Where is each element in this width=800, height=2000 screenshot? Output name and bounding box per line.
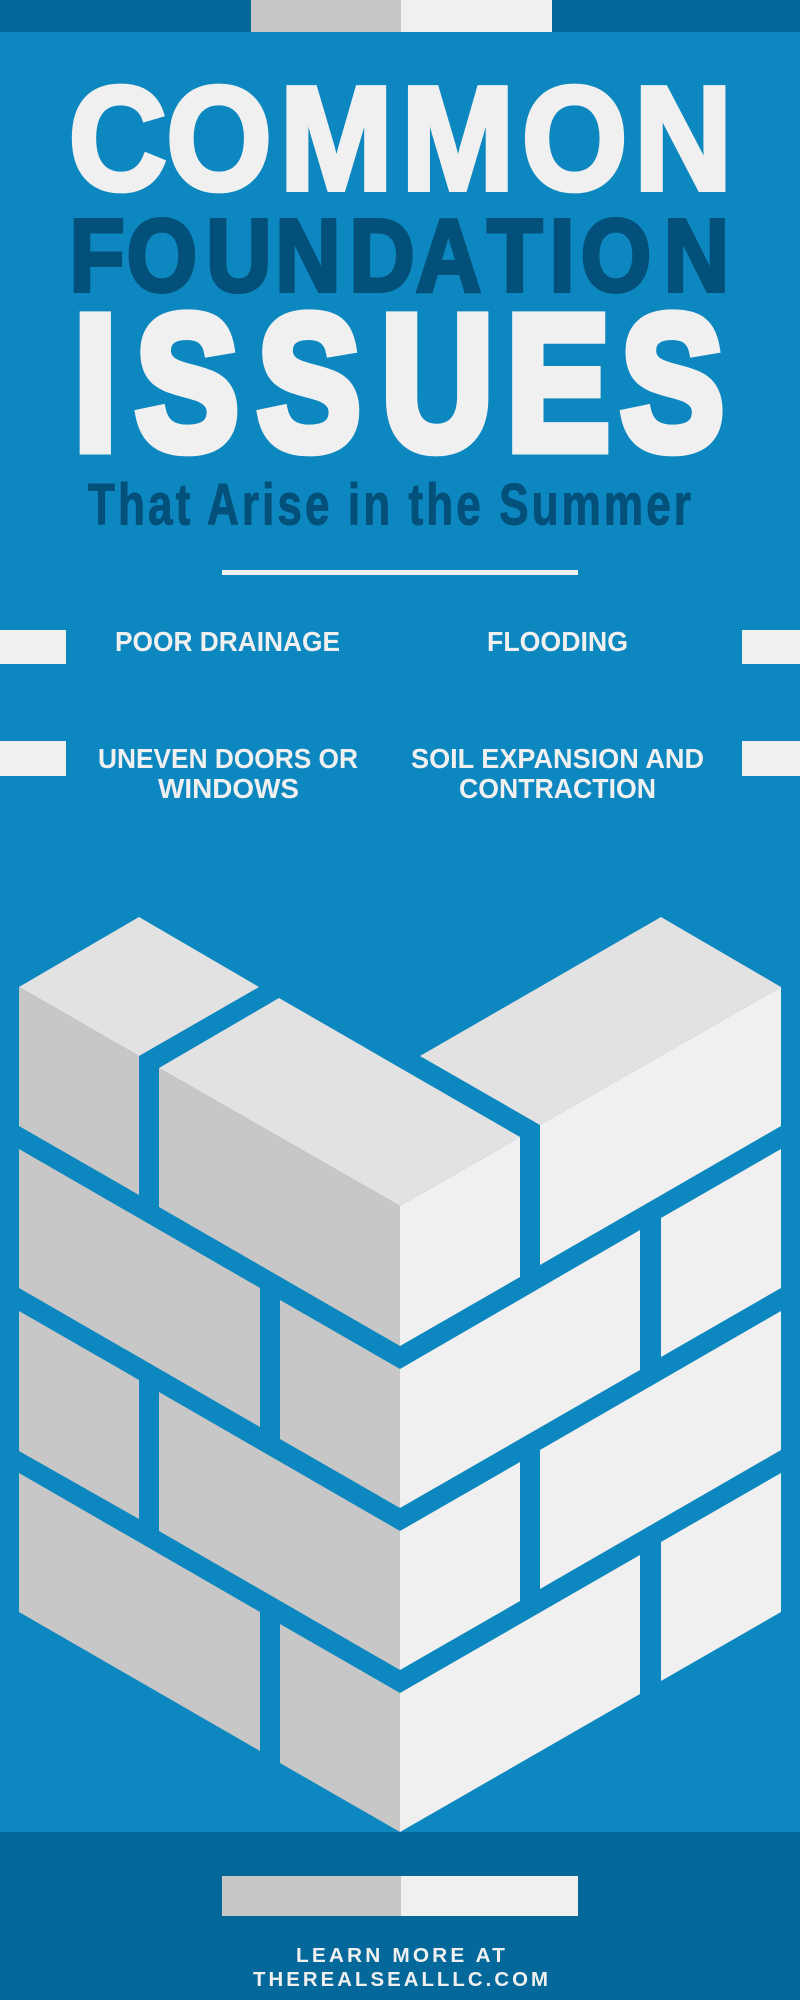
issue: uneven doors or windows xyxy=(98,743,358,804)
footer call to action xyxy=(253,1945,551,1991)
footer call to action: LEARN MORE AT xyxy=(296,1945,508,1967)
issue: soil expansion and contraction: CONTRACTION xyxy=(459,773,656,804)
issue: uneven doors or windows: WINDOWS xyxy=(158,773,299,804)
title line: common: COMMON xyxy=(69,56,732,222)
brick wall illustration xyxy=(19,917,781,1832)
title line: issues: ISSUES xyxy=(74,276,724,491)
bricks: row four xyxy=(19,1473,781,1832)
issue: uneven doors or windows: UNEVEN DOORS OR xyxy=(98,743,358,774)
brick: top corner xyxy=(159,998,520,1346)
issue: soil expansion and contraction: SOIL EXPANSION AND xyxy=(411,743,704,774)
side tabs left xyxy=(0,630,66,776)
issue: flooding: FLOODING xyxy=(487,626,628,657)
issue: poor drainage: POOR DRAINAGE xyxy=(115,626,340,657)
brick: top right xyxy=(420,917,781,1265)
footer call to action: THEREALSEALLLC.COM xyxy=(253,1969,551,1991)
title xyxy=(69,56,732,491)
issue: soil expansion and contraction xyxy=(411,743,704,804)
bricks: row two xyxy=(19,1149,781,1508)
title line: foundation: FOUNDATION xyxy=(69,198,729,313)
side tabs right xyxy=(742,630,800,776)
footer two-tone bar xyxy=(222,1876,578,1916)
brick: top left xyxy=(19,917,259,1195)
bottom band xyxy=(0,1832,800,2000)
top band xyxy=(0,0,800,32)
divider line xyxy=(222,570,578,575)
bricks: row three xyxy=(19,1311,781,1670)
